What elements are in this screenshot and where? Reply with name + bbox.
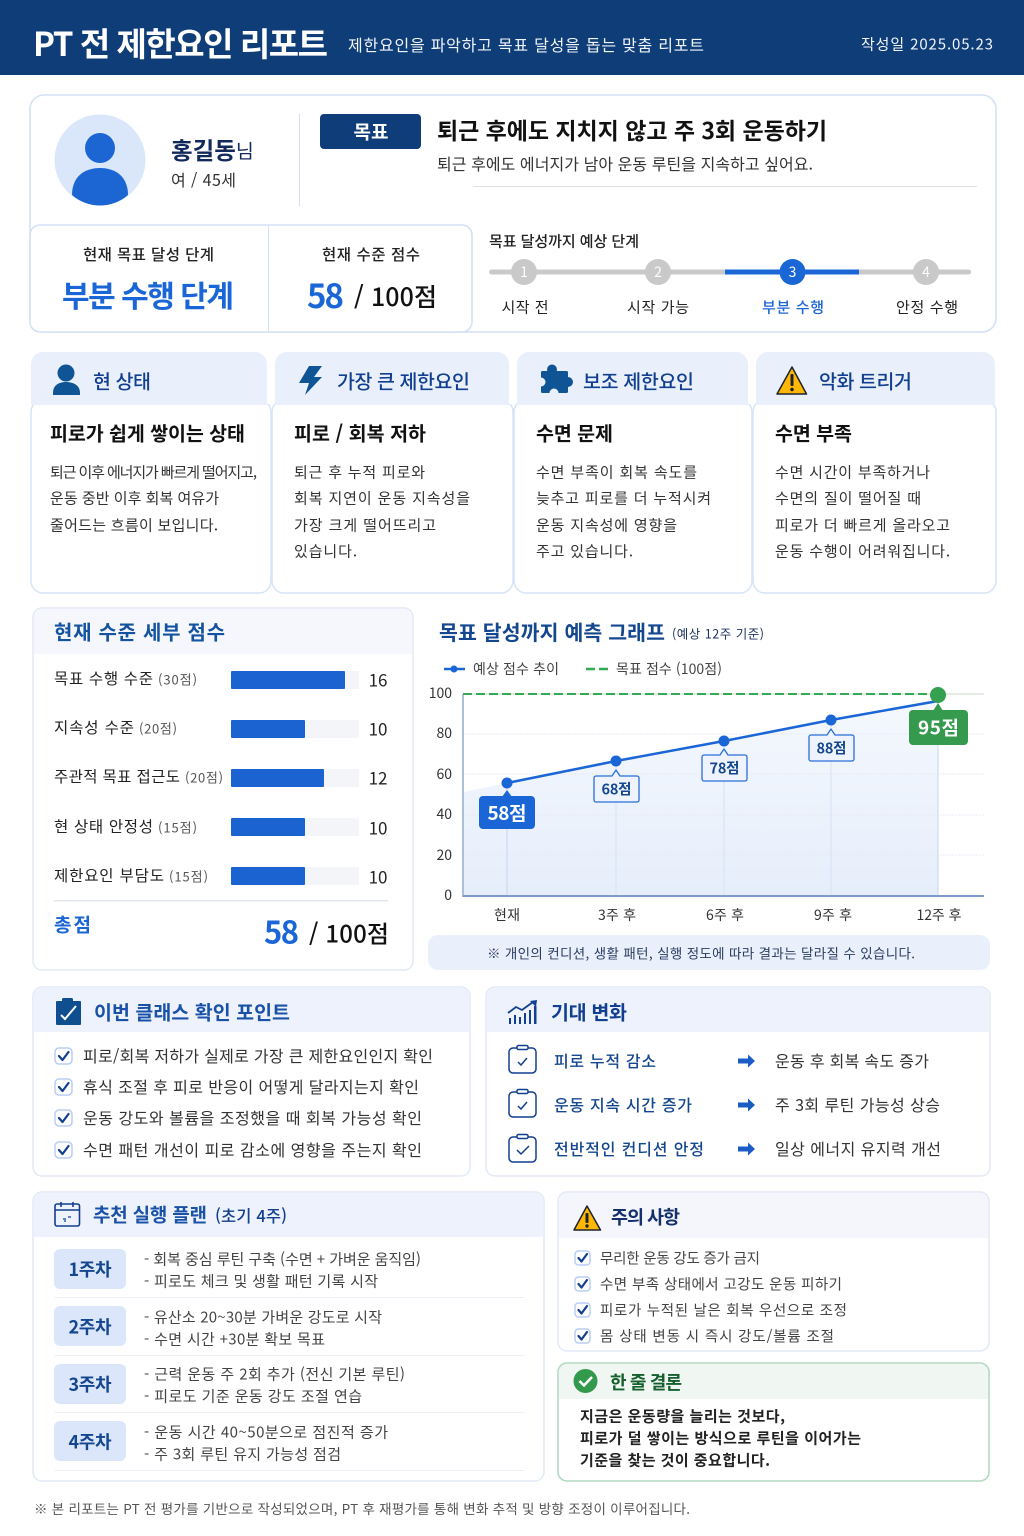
panel: worsening trigger: 악화 트리거 [819,366,912,394]
x axis: 9주 후 [814,905,852,925]
x axis: 12주 후 [916,905,962,925]
progress stepper: 안정 수행 [896,296,958,318]
body text: 줄어드는 흐름이 보입니다. [50,514,218,536]
panel: recommended plan [33,1192,544,1481]
panel: expected changes [486,987,990,1176]
check item 1: 피로/회복 저하가 실제로 가장 큰 제한요인인지 확인 [83,1043,433,1067]
panel: biggest limiting factor [272,352,515,593]
current stage: 현재 목표 달성 단계 [83,243,214,265]
change row 2: 주 3회 루틴 가능성 상승 [775,1092,940,1116]
footer note: ※ 본 리포트는 PT 전 평가를 기반으로 작성되었으며, PT 후 재평가를 통해 변화 추적 및 방향 조정이 이루어집니다. [34,1498,690,1518]
conclusion text: 기준을 찾는 것이 중요합니다. [580,1450,770,1470]
progress stepper: 목표 달성까지 예상 단계 [489,230,639,252]
score row: limiting factor burden: 제한요인 부담도 [54,864,164,886]
progress stepper: 3 [789,262,796,282]
body text: 수면의 질이 떨어질 때 [775,488,921,508]
week 3: - 피로도 기준 운동 강도 조절 연습 [144,1386,362,1406]
panel: detailed scores [33,608,413,970]
week 4: - 주 3회 루틴 유지 가능성 점검 [144,1444,341,1464]
icon: lightning bolt [299,366,322,395]
callout: 78 points [702,749,747,781]
score row: goal performance: (30점) [158,670,197,688]
x axis [463,896,984,925]
body text: 있습니다. [294,540,357,562]
panel: class check points: 이번 클래스 확인 포인트 [94,996,290,1026]
panel: cautions: 주의 사항 [611,1204,680,1230]
caution item 3: 피로가 누적된 날은 회복 우선으로 조정 [600,1300,847,1320]
body text: 주고 있습니다. [536,540,633,562]
callout: 88 points [809,729,854,761]
conclusion text [580,1406,861,1470]
panel: worsening trigger: 수면 부족 [775,418,852,446]
body text [536,462,711,562]
icon: warning triangle [777,367,806,394]
panel: secondary limiting factor [514,352,754,593]
title: PT 전 제한요인 리포트 [33,18,328,66]
panel: current state: 피로가 쉽게 쌓이는 상태 [50,418,245,446]
body text [775,462,950,562]
week 3 [54,1364,525,1413]
current score: 58 [307,270,344,318]
score row: persistence: (20점) [139,718,177,738]
score row: subjective goal access: 12 [369,764,387,790]
week 2: - 유산소 20~30분 가벼운 강도로 시작 [144,1306,382,1328]
y axis: 100 [429,683,452,703]
body text: 운동 수행이 어려워집니다. [775,540,950,562]
progress stepper: 시작 전 [502,296,548,318]
panel: biggest limiting factor: 피로 / 회복 저하 [294,418,426,446]
change row 3: 일상 에너지 유지력 개선 [775,1136,941,1160]
area under line [464,701,938,895]
callout: 68 points [594,770,639,802]
target line [463,693,984,695]
goal title: 퇴근 후에도 지치지 않고 주 3회 운동하기 [437,112,827,146]
callout: 68 points: 68점 [602,778,632,800]
panel: secondary limiting factor: 수면 문제 [536,418,613,446]
heading: 현재 수준 세부 점수 [54,616,225,646]
week 2: - 수면 시간 +30분 확보 목표 [144,1328,325,1350]
chart legend: 목표 점수 (100점) [616,659,722,679]
progress stepper: 2 [654,262,662,282]
member details: 여 / 45세 [171,167,236,191]
heading: (초기 4주) [215,1203,287,1227]
subtitle: 제한요인을 파악하고 목표 달성을 돕는 맞춤 리포트 [348,32,704,56]
conclusion text: 피로가 덜 쌓이는 방식으로 루틴을 이어가는 [580,1428,861,1448]
score row: goal performance [54,666,387,692]
week 1: - 피로도 체크 및 생활 패턴 기록 시작 [144,1270,378,1292]
panel: class check points [33,987,470,1176]
score row: persistence: 지속성 수준 [54,716,134,738]
score row: current stability [54,814,387,840]
callout: 95 points: 95점 [918,714,959,740]
total score: 총점 [54,910,91,938]
score row: limiting factor burden [54,864,387,888]
total score [54,908,389,952]
x axis: 현재 [494,905,520,925]
note: ※ 개인의 컨디션, 생활 패턴, 실행 정도에 따라 결과는 달라질 수 있습니다. [487,942,915,962]
callout: 95 points [909,703,968,745]
body text: 수면 부족이 회복 속도를 [536,462,697,482]
y axis [429,683,463,905]
score row: current stability: (15점) [158,818,197,836]
change row 1 [509,1046,929,1073]
progress stepper [489,230,971,318]
body text [294,462,470,562]
current stage [62,243,234,316]
callout: 58 points: 58점 [488,799,526,826]
panel: current state: 현 상태 [93,366,151,394]
y axis: 80 [436,723,452,743]
current score: 현재 수준 점수 [322,243,420,265]
icon: puzzle piece [536,364,573,398]
change row 1: 피로 누적 감소 [554,1048,656,1072]
week 2: 2주차 [68,1314,112,1340]
week 4: - 운동 시간 40~50분으로 점진적 증가 [144,1422,388,1442]
progress stepper: 시작 가능 [627,296,689,318]
note [428,935,990,970]
icon: clipboard [509,1090,536,1117]
icon: user avatar [54,114,146,206]
week 4 [54,1421,525,1471]
change row 3 [509,1134,941,1162]
heading: 추천 실행 플랜 [93,1200,207,1228]
check item 4: 수면 패턴 개선이 피로 감소에 영향을 주는지 확인 [83,1137,422,1161]
caution item 1: 무리한 운동 강도 증가 금지 [600,1248,760,1268]
goal badge [320,114,421,149]
progress stepper: 4 [922,262,930,282]
goal description: 퇴근 후에도 에너지가 남아 운동 루틴을 지속하고 싶어요. [437,151,813,175]
change row 2: 운동 지속 시간 증가 [554,1092,692,1116]
goal badge: 목표 [354,118,388,144]
current score [307,243,437,318]
body text: 수면 시간이 부족하거나 [775,462,930,482]
change row 1: 운동 후 회복 속도 증가 [775,1048,929,1072]
total score: / 100점 [309,914,389,950]
check item 3: 운동 강도와 볼륨을 조정했을 때 회복 가능성 확인 [83,1105,422,1129]
chart legend [444,659,722,679]
chart legend: 예상 점수 추이 [473,659,559,679]
current score: / 100점 [354,278,437,314]
progress stepper: 부분 수행 [762,296,824,318]
y axis: 20 [436,845,452,865]
icon: rising chart [508,1000,537,1024]
icon: green check [574,1369,598,1393]
score row: persistence [54,716,387,740]
projected score line [507,701,938,783]
panel: biggest limiting factor: 가장 큰 제한요인 [337,366,470,394]
body text: 피로가 더 빠르게 올라오고 [775,514,950,536]
panel: one-line conclusion [558,1363,989,1481]
score row: subjective goal access: 주관적 목표 접근도 [54,765,180,787]
icon: calendar [55,1202,80,1226]
body text: 운동 지속성에 영향을 [536,514,677,536]
score row: limiting factor burden: (15점) [169,866,208,886]
body text [50,462,257,536]
week 2 [54,1306,525,1356]
panel: current state [31,352,273,593]
callout: 78 points: 78점 [710,758,740,778]
callout: 88 points: 88점 [816,738,846,758]
y axis: 40 [436,804,452,824]
icon: person [53,364,80,395]
score row: goal performance: 목표 수행 수준 [54,667,153,689]
score row: subjective goal access: (20점) [185,768,223,786]
week 1: 1주차 [68,1256,112,1282]
y axis: 60 [436,764,452,784]
x axis: 6주 후 [706,905,744,925]
caution item 2: 수면 부족 상태에서 고강도 운동 피하기 [600,1274,842,1294]
week 4: 4주차 [68,1428,112,1454]
change row 3: 전반적인 컨디션 안정 [554,1136,704,1160]
panel: secondary limiting factor: 보조 제한요인 [583,366,694,394]
chart heading [439,616,764,646]
panel: one-line conclusion: 한 줄 결론 [610,1369,682,1395]
check item 2: 휴식 조절 후 피로 반응이 어떻게 달라지는지 확인 [83,1074,419,1098]
change row 2 [509,1090,940,1117]
score row: limiting factor burden: 10 [369,864,387,888]
body text: 가장 크게 떨어뜨리고 [294,514,436,536]
week 1 [54,1248,525,1298]
score row: current stability: 현 상태 안정성 [54,815,153,837]
body text: 퇴근 이후 에너지가 빠르게 떨어지고, [50,462,257,482]
panel: profile and goal [30,95,996,332]
week 3: 3주차 [68,1371,112,1397]
panel: cautions [558,1192,989,1351]
chart heading: 목표 달성까지 예측 그래프 [439,616,665,646]
score row: current stability: 10 [369,814,387,840]
current stage and score box [30,225,472,332]
icon: clipboard check [56,998,81,1025]
score row: persistence: 10 [369,716,387,740]
week 1: - 회복 중심 루틴 구축 (수면 + 가벼운 움직임) [144,1248,421,1270]
callout: 58 points [479,790,535,829]
body text: 늦추고 피로를 더 누적시켜 [536,488,711,508]
body text: 퇴근 후 누적 피로와 [294,462,425,482]
report date: 작성일 2025.05.23 [861,34,993,54]
member name: 홍길동님 [171,132,254,166]
y axis: 0 [444,885,452,905]
caution item 4: 몸 상태 변동 시 즉시 강도/볼륨 조절 [600,1326,834,1346]
current stage: 부분 수행 단계 [62,272,234,316]
icon: clipboard [509,1134,536,1162]
icon: warning triangle [574,1206,600,1230]
score row: goal performance: 16 [369,666,387,692]
week 3: - 근력 운동 주 2회 추가 (전신 기본 루틴) [144,1364,405,1384]
panel: worsening trigger [753,352,996,593]
x axis: 3주 후 [598,905,636,925]
panel: expected changes: 기대 변화 [551,996,627,1026]
chart: projected goal attainment [428,616,990,970]
heading [93,1200,287,1228]
score row: subjective goal access [54,764,387,790]
progress stepper: 1 [520,262,528,282]
total score: 58 [264,908,299,952]
body text: 운동 중반 이후 회복 여유가 [50,488,219,508]
icon: clipboard [509,1046,536,1073]
body text: 회복 지연이 운동 지속성을 [294,488,470,508]
chart heading: (예상 12주 기준) [672,624,764,642]
header banner [0,0,1024,75]
conclusion text: 지금은 운동량을 늘리는 것보다, [580,1406,785,1426]
